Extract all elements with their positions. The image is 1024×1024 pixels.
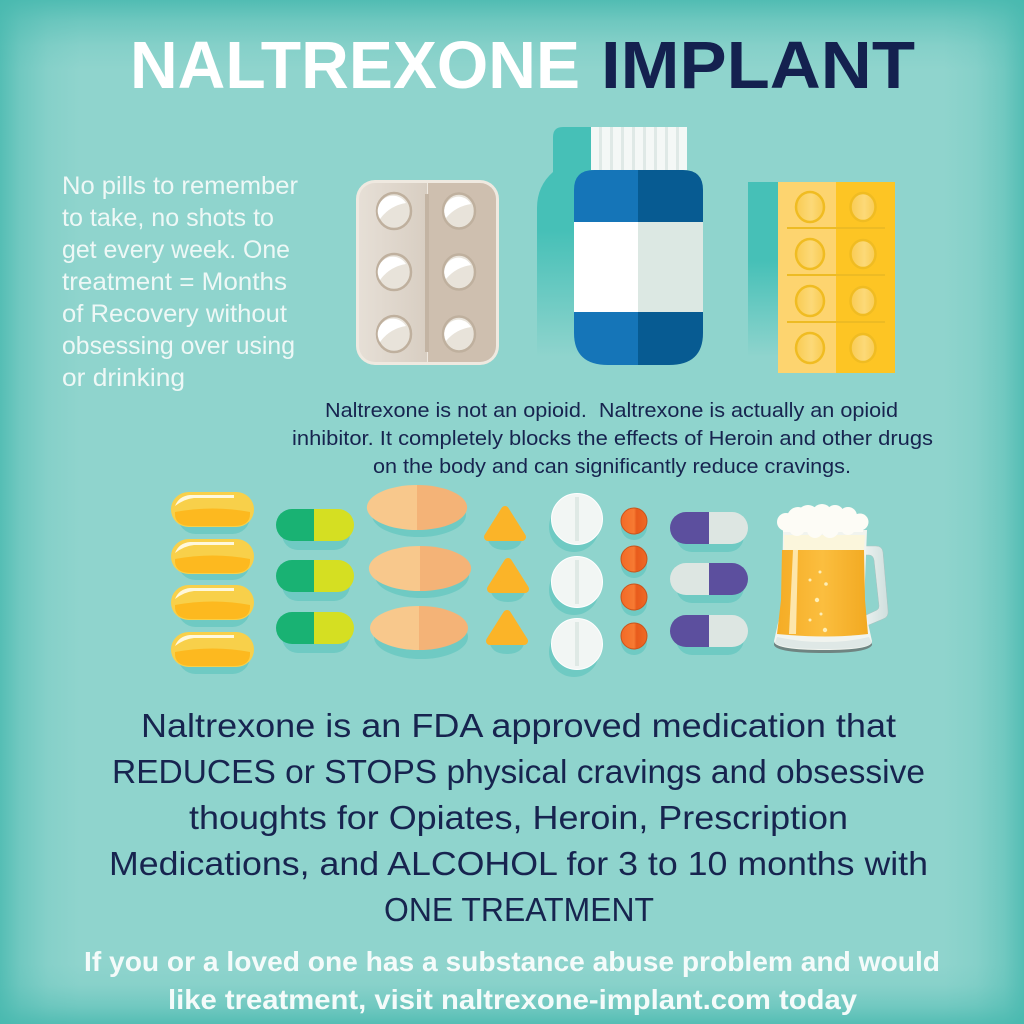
text block: not an opioid: Naltrexone is not an opioid. Naltrexone is actually an opioid [325, 399, 898, 422]
text block: FDA approved statement: thoughts for Opiates, Heroin, Prescription [189, 800, 848, 837]
icon: yellow blister strip [748, 182, 895, 373]
icon: beige blister pack [356, 180, 499, 365]
text block: FDA approved statement: REDUCES or STOPS physical cravings and obsessive [112, 754, 925, 791]
text block: no pills: get every week. One [62, 236, 290, 264]
text block: FDA approved statement: ONE TREATMENT [384, 892, 654, 929]
mug handle [862, 546, 888, 627]
text block: no pills: of Recovery without [62, 300, 287, 328]
text block: no pills: obsessing over using [62, 332, 295, 360]
icon: orange round pills [621, 508, 647, 655]
text block: no pills: treatment = Months [62, 268, 287, 296]
text block: FDA approved statement: Naltrexone is an FDA approved medication that [141, 708, 897, 745]
icon: green capsules [276, 509, 354, 653]
text block: FDA approved statement [109, 708, 928, 929]
text block: no pills: to take, no shots to [62, 204, 274, 232]
icon: peach oval tablets [367, 485, 471, 659]
beer foam [777, 504, 868, 538]
mug glass [774, 530, 872, 652]
icon: white round tablets [549, 494, 602, 677]
title: NALTREXONE [130, 28, 580, 103]
text block: not an opioid [292, 399, 933, 478]
text block: not an opioid: inhibitor. It completely blocks the effects of Heroin and other drugs [292, 427, 933, 450]
text block: no pills: or drinking [62, 364, 185, 392]
text block: no pills [62, 172, 298, 392]
title [130, 28, 915, 103]
icon: yellow softgels [171, 492, 254, 674]
text block: not an opioid: on the body and can significantly reduce cravings. [373, 455, 851, 478]
title: IMPLANT [601, 28, 915, 103]
text block: no pills: No pills to remember [62, 172, 298, 200]
call to action: like treatment, visit naltrexone-implant.com today [168, 984, 858, 1015]
call to action [84, 946, 940, 1015]
call to action: If you or a loved one has a substance abuse problem and would [84, 946, 940, 977]
icon: purple capsules [670, 512, 748, 655]
icon: orange triangle tablets [487, 510, 526, 654]
icon: pill bottle [537, 127, 703, 365]
text block: FDA approved statement: Medications, and ALCOHOL for 3 to 10 months with [109, 846, 928, 883]
icon: beer mug [774, 504, 888, 653]
